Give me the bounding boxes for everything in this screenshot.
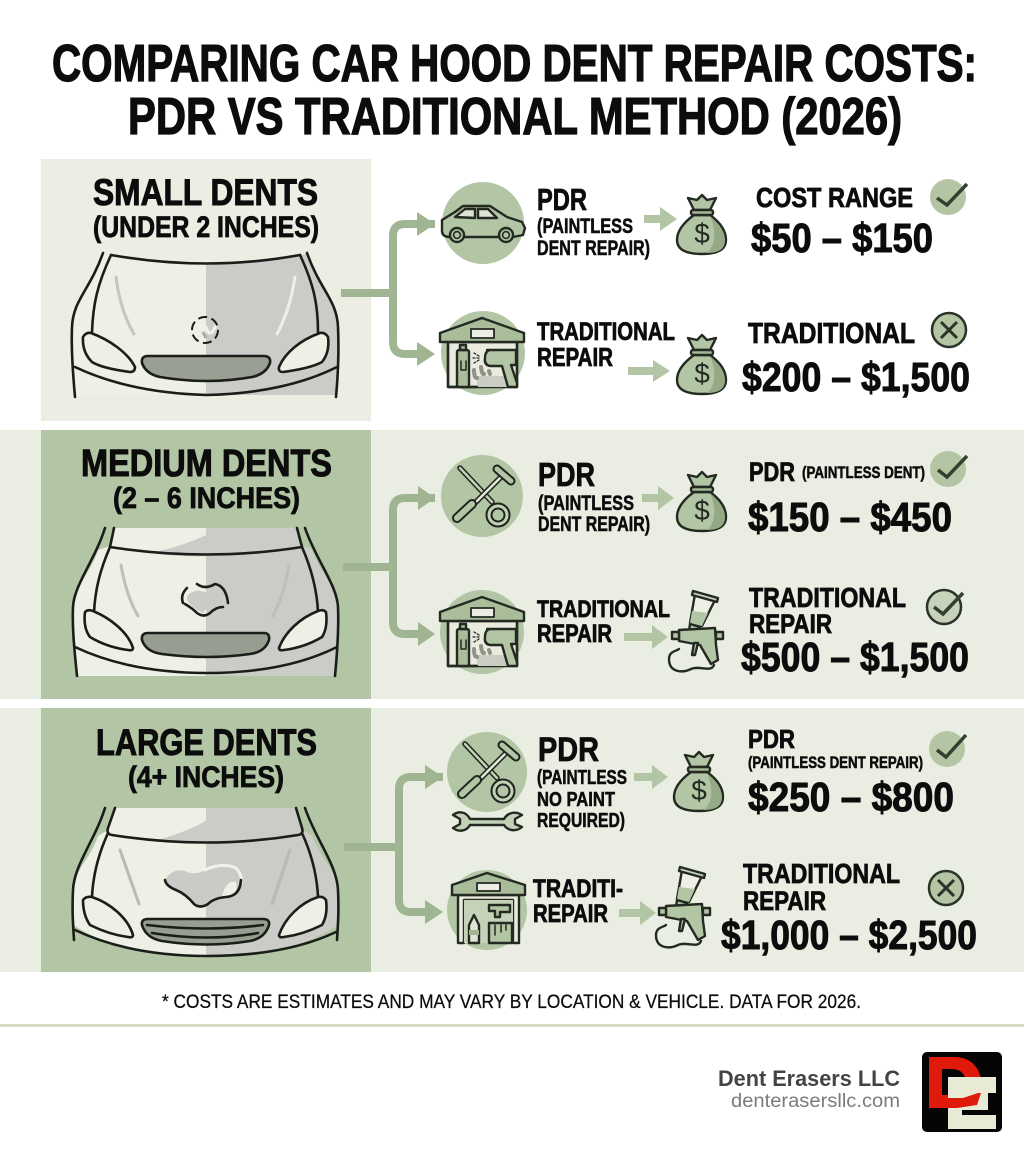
icon: money bag: $ [694,218,710,249]
method label: REQUIRED) [537,810,625,832]
method label: REPAIR [537,620,612,648]
method label: PDR [538,456,595,493]
cost: PDR medium [748,457,952,540]
method label: DENT REPAIR) [537,237,650,260]
large dents heading: (4+ INCHES) [128,761,284,794]
connector arrow: small dents [341,212,435,366]
car hood: small dent [72,253,338,397]
icon: spray gun [669,591,723,671]
cost: PDR medium: (PAINTLESS DENT) [802,463,925,482]
medium dents heading: MEDIUM DENTS [81,443,332,485]
cost: traditional medium: REPAIR [749,609,832,639]
method label [537,318,675,372]
method label: TRADITIONAL [537,318,675,346]
method label: PDR [538,731,599,769]
cost: PDR small: COST RANGE [756,182,913,213]
row: medium dents traditional [440,582,969,680]
icon: cross [929,871,963,905]
icon: check ring [927,590,963,624]
car hood: large dent [73,808,338,957]
icon: money bag [677,472,726,531]
cost: PDR medium: PDR [749,457,795,487]
small dents background [41,159,371,421]
car hood: medium dent [73,528,338,676]
arrow [628,360,670,382]
method label: (PAINTLESS [538,492,634,515]
icon: cross [932,313,966,347]
connector arrow: medium dents [343,486,435,646]
large dents heading [96,722,317,794]
icon: tools in circle [441,455,523,537]
row: small dents PDR [442,179,967,264]
panel: medium dents [0,430,1024,699]
cost: traditional large [721,858,977,958]
method label: REPAIR [533,900,608,928]
arrow [634,765,668,789]
row: large dents traditional [447,858,977,958]
icon: wrench [453,812,522,831]
small dents heading: (UNDER 2 INCHES) [93,211,319,244]
icon: spray gun [656,867,710,947]
cost: traditional large: TRADITIONAL [743,858,900,889]
row: large dents PDR [447,724,966,832]
method label [537,182,650,260]
logo [922,1052,1002,1132]
large left panel [41,708,371,972]
icon: check [930,451,967,487]
arrow [642,486,674,510]
row: medium dents PDR [441,451,967,540]
brand text: Dent Erasers LLC [718,1066,900,1091]
large dents heading: LARGE DENTS [96,722,317,763]
icon: money bag: $ [691,775,707,806]
cost: PDR large [748,724,954,820]
row: small dents traditional [440,311,970,400]
method label: DENT REPAIR) [538,513,650,536]
cost: PDR large: (PAINTLESS DENT REPAIR) [748,753,923,772]
method label: PDR [537,182,587,217]
icon: garage in circle [440,590,524,674]
icon: car in circle [442,182,525,264]
cost: traditional medium [741,582,969,680]
medium left panel [41,430,371,699]
small dents heading: SMALL DENTS [93,172,318,213]
brand text: denterasersllc.com [731,1091,900,1112]
large band background [0,708,1024,972]
icon: garage in circle [440,311,525,395]
panel: small dents [41,159,371,421]
method label: (PAINTLESS [537,767,627,789]
cost: PDR medium: $150 – $450 [748,494,952,540]
icon: money bag [677,195,726,254]
cost: PDR small [751,182,933,261]
method label [537,596,670,648]
title [52,35,977,146]
icon: garage with supplies in circle [447,870,527,950]
small dents heading [93,172,319,244]
cost: PDR large: $250 – $800 [748,774,954,820]
icon: tools in circle [447,732,527,812]
connector arrow: large dents [344,765,443,924]
arrow [644,207,677,231]
cost: traditional medium: TRADITIONAL [749,582,906,613]
icon: money bag: $ [694,495,710,526]
icon: check [929,731,966,767]
brand text [718,1066,900,1112]
footnote: * COSTS ARE ESTIMATES AND MAY VARY BY LOCATION & VEHICLE. DATA FOR 2026. [162,992,861,1013]
cost: traditional large: REPAIR [743,886,826,916]
method label: TRADITIONAL [537,596,670,623]
panel: large dents [0,708,1024,972]
method label: NO PAINT [537,789,615,811]
arrow [624,625,668,649]
icon: money bag [677,335,726,394]
cost: traditional small [742,318,970,400]
cost: traditional small: TRADITIONAL [748,318,915,350]
cost: traditional large: $1,000 – $2,500 [721,912,977,958]
arrow [619,901,656,925]
method label [537,731,627,832]
method label: REPAIR [537,342,613,372]
medium dents heading [81,443,332,515]
method label: (PAINTLESS [537,215,633,238]
medium dents heading: (2 – 6 INCHES) [113,482,300,515]
cost: PDR large: PDR [748,724,795,754]
icon: money bag: $ [694,358,710,389]
icon: check [930,179,967,215]
medium band background [0,430,1024,699]
cost: traditional medium: $500 – $1,500 [741,634,969,680]
method label [533,875,623,928]
icon: money bag [674,752,723,811]
method label [538,456,650,536]
cost: PDR small: $50 – $150 [751,215,933,261]
method label: TRADITI- [533,875,623,903]
cost: traditional small: $200 – $1,500 [742,354,970,400]
